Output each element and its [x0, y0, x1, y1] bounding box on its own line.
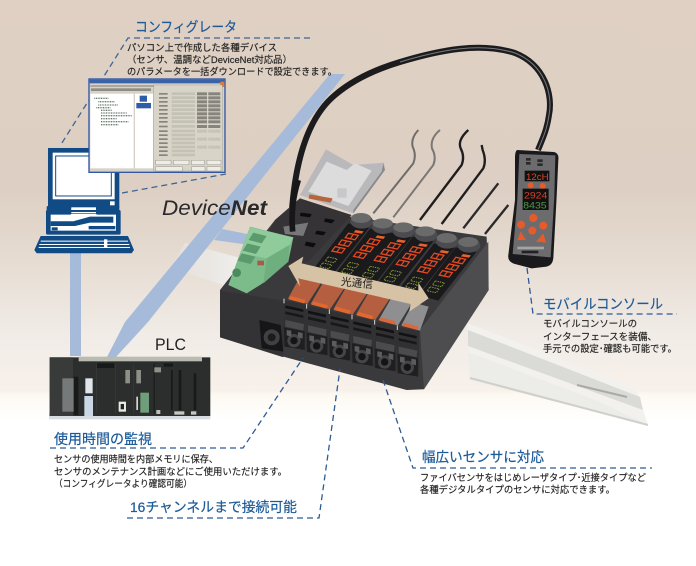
- right side face: [420, 242, 489, 389]
- orange buttons: [517, 214, 547, 243]
- leader: 16 channels: [127, 369, 340, 518]
- leader: configurator: [60, 38, 310, 193]
- text: usage time description: （コンフィグレータより確認可能）: [54, 478, 192, 490]
- heading: wide sensor support: 幅広いセンサに対応: [422, 449, 544, 465]
- arrow: optical communication: [288, 257, 429, 312]
- device: sensor amplifier unit: [220, 149, 489, 390]
- left terminal screw: [259, 320, 283, 352]
- logo: DeviceNet: DeviceNet: [162, 197, 268, 220]
- DIN rail: [170, 243, 648, 425]
- cable: mobile console: [291, 48, 550, 228]
- text: usage time description: センサのメンテナンス計画などにご使用いただけます。: [54, 466, 287, 478]
- heading: mobile console: モバイルコンソール: [543, 296, 663, 312]
- green connector: [228, 227, 293, 293]
- sensor cables: [373, 130, 508, 234]
- text: wide sensor description: 各種デジタルタイプのセンサに対応できます。: [420, 484, 615, 496]
- text: usage time description: [54, 454, 287, 490]
- device: mobile console: [508, 150, 558, 268]
- text: mobile console description: [543, 319, 677, 355]
- text: configurator description: パソコン上で作成した各種デバイス: [127, 42, 277, 54]
- text: mobile console description: モバイルコンソールの: [543, 319, 637, 330]
- text: mobile console description: インターフェースを装備、: [543, 331, 657, 343]
- top panel: [270, 198, 352, 263]
- screenshot: configurator window: [88, 78, 226, 173]
- main body: [220, 198, 489, 390]
- heading: configurator: コンフィグレータ: [135, 19, 237, 35]
- leader: usage time monitoring: [50, 358, 303, 448]
- PLC label: PLC: [155, 336, 186, 354]
- leader: wide sensor support: [383, 380, 652, 468]
- display: upper: 12cH: [526, 172, 549, 182]
- device: PLC: [49, 357, 210, 419]
- text: configurator description: [127, 42, 337, 78]
- text: configurator description: のパラメータを一括ダウンロードで設定できます。: [127, 66, 337, 78]
- text: usage time description: センサの使用時間を内部メモリに保存、: [54, 454, 218, 466]
- terminal blocks: [283, 299, 419, 377]
- text: mobile console description: 手元での設定･確認も可能です。: [543, 343, 677, 355]
- label: optical communication: 光通信: [340, 275, 374, 291]
- heading: usage time monitoring: 使用時間の監視: [54, 431, 152, 447]
- text: wide sensor description: [420, 472, 646, 496]
- text: wide sensor description: ファイバセンサをはじめレーザタイプ･近接タイプなど: [420, 472, 646, 484]
- text: configurator description: （センサ、温調などDeviceNet対応品）: [127, 54, 292, 66]
- background: [0, 0, 696, 420]
- display: red digits: 2924: [524, 190, 547, 200]
- left front face: [220, 291, 283, 357]
- network lines: [70, 74, 345, 357]
- cable socket: [283, 223, 308, 236]
- icon: desktop computer: [34, 148, 134, 253]
- red and grey labels: [288, 277, 429, 331]
- heading: 16 channels: 16チャンネルまで接続可能: [130, 499, 297, 515]
- cover flap: [300, 149, 385, 213]
- leader: mobile console: [527, 268, 677, 314]
- display: green digits: 8435: [523, 200, 547, 210]
- sensor strips: [312, 213, 480, 301]
